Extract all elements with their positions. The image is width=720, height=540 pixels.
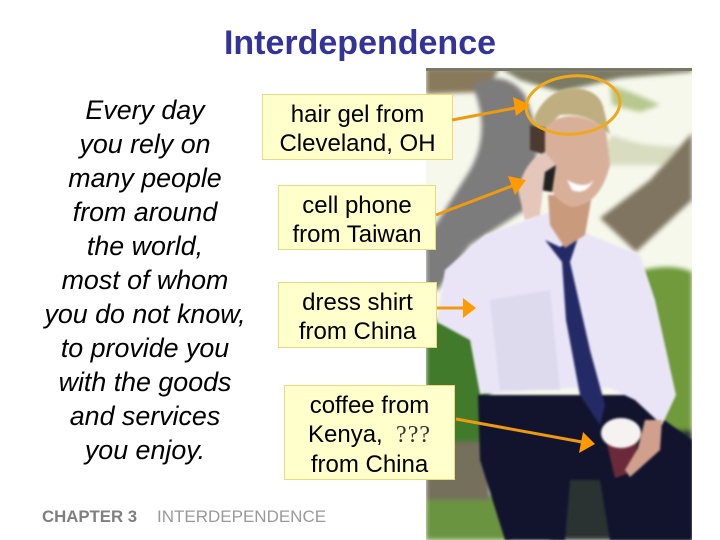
text block: intro statement: most of whom <box>62 265 228 295</box>
neck and face <box>548 195 592 248</box>
footer: chapter label <box>42 507 326 526</box>
callout: hair gel: Cleveland, OH <box>279 130 436 157</box>
text block: intro statement: you rely on <box>79 129 211 159</box>
title: Interdependence <box>224 24 496 62</box>
text block: intro statement: you do not know, <box>44 299 246 329</box>
text block: intro statement: many people <box>68 163 222 193</box>
text block: intro statement: from around <box>73 197 217 227</box>
callout: coffee: coffee from <box>310 392 429 419</box>
callout: coffee: from China <box>311 451 428 478</box>
shirt <box>437 212 676 425</box>
footer: chapter label: INTERDEPENDENCE <box>157 507 326 526</box>
text block: intro statement: to provide you <box>61 333 229 363</box>
arrow to hair <box>452 97 530 120</box>
coffee cup and hand <box>606 440 638 478</box>
phone and hand <box>540 160 556 192</box>
callout: hair gel: hair gel from <box>291 101 424 128</box>
callout: dress shirt <box>278 282 437 348</box>
hair <box>534 88 610 150</box>
callout: dress shirt: dress shirt <box>302 289 413 316</box>
trousers <box>478 395 692 540</box>
text block: intro statement: with the goods <box>59 367 231 397</box>
arrow to coffee <box>456 419 595 453</box>
footer: chapter label: CHAPTER 3 <box>42 507 137 526</box>
arrow to shirt <box>437 298 476 318</box>
text block: intro statement: Every day <box>85 95 205 125</box>
callout: hair gel <box>262 94 453 160</box>
ellipse around hair <box>524 72 622 138</box>
text block: intro statement: you enjoy. <box>85 435 205 465</box>
callout: cell phone: cell phone <box>302 192 412 219</box>
text block: intro statement: the world, <box>87 231 203 261</box>
photo: smiling man on phone under a tree <box>426 68 692 540</box>
callout: coffee <box>284 385 455 480</box>
tie <box>545 238 605 425</box>
callout: cell phone <box>278 185 436 250</box>
callout: coffee: Kenya, ??? <box>308 421 431 448</box>
arrow to phone <box>436 176 526 215</box>
text block: intro statement <box>43 95 246 465</box>
callout: cell phone: from Taiwan <box>293 221 421 248</box>
text block: intro statement: and services <box>70 401 220 431</box>
callout: dress shirt: from China <box>299 318 416 345</box>
